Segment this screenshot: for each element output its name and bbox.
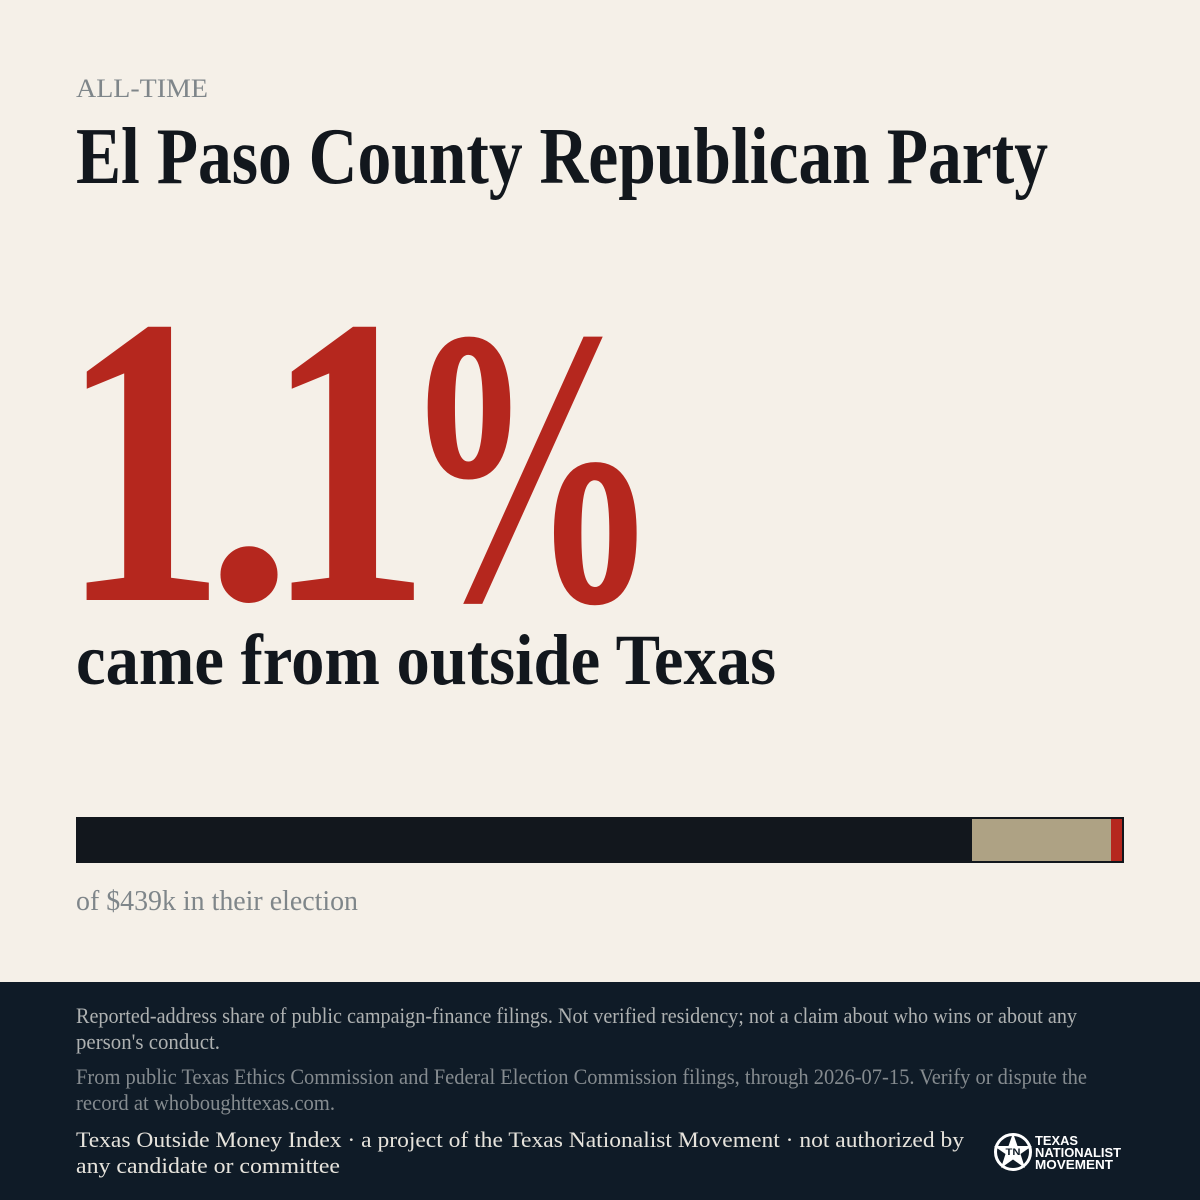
logo wordmark xyxy=(1035,1133,1121,1172)
logo: Texas Nationalist Movement xyxy=(994,1133,1121,1172)
attribution text xyxy=(76,1127,964,1178)
source text: record at whoboughttexas.com. xyxy=(76,1090,335,1115)
subheading: came from outside Texas xyxy=(76,620,776,700)
icon: star in circle: TN xyxy=(1006,1147,1020,1157)
disclaimer text xyxy=(76,1003,1077,1054)
big percentage: % xyxy=(401,247,661,686)
attribution text: any candidate or committee xyxy=(76,1153,340,1178)
source text xyxy=(76,1064,1087,1115)
big percentage xyxy=(60,231,661,690)
eyebrow label: ALL-TIME xyxy=(76,74,208,103)
source text: From public Texas Ethics Commission and Federal Election Commission filings, through 2026-07-15. Verify or dispute the xyxy=(76,1064,1087,1089)
stacked bar xyxy=(76,817,1124,863)
footer panel xyxy=(0,982,1200,1200)
big percentage: . xyxy=(205,286,293,674)
attribution text: Texas Outside Money Index · a project of the Texas Nationalist Movement · not authorized by xyxy=(76,1127,964,1152)
disclaimer text: person's conduct. xyxy=(76,1029,220,1054)
big percentage: 1 xyxy=(60,231,226,690)
bar caption: of $439k in their election xyxy=(76,885,358,917)
big percentage: 1 xyxy=(265,231,431,690)
logo wordmark: MOVEMENT xyxy=(1035,1157,1113,1172)
logo wordmark: NATIONALIST xyxy=(1035,1145,1121,1160)
logo wordmark: TEXAS xyxy=(1035,1133,1078,1148)
disclaimer text: Reported-address share of public campaign-finance filings. Not verified residency; not a claim about who wins or about any xyxy=(76,1003,1077,1028)
